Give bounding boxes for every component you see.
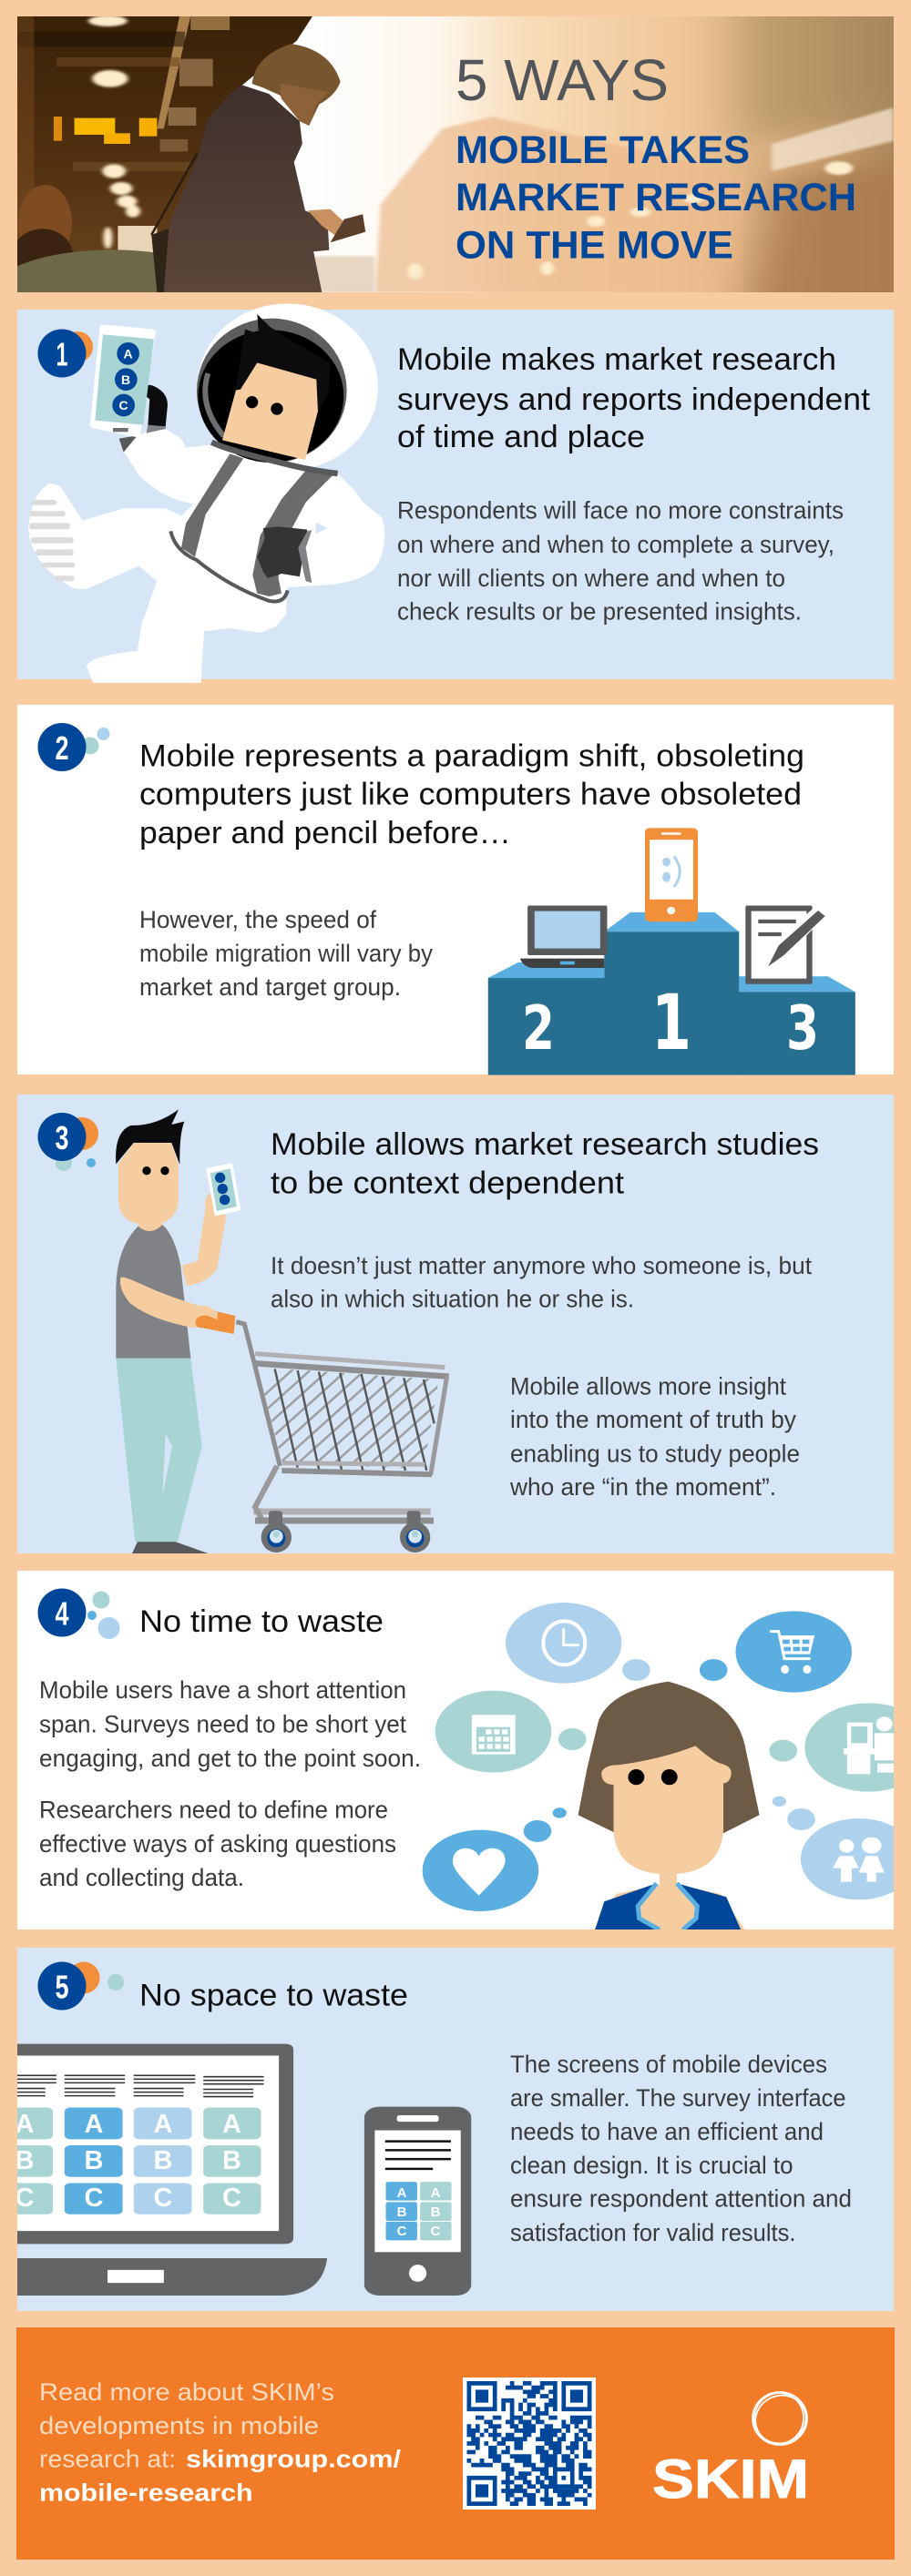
number badge 5: 5 <box>55 1969 69 2005</box>
number badge 4 <box>38 1588 120 1639</box>
heading: computers just like computers have obsoleted <box>139 778 802 812</box>
number badge 3 <box>38 1113 98 1171</box>
body text: span. Surveys need to be short yet <box>39 1710 407 1737</box>
read more text <box>39 2378 402 2506</box>
body text: moment of truth: into the moment of truth by <box>510 1406 797 1433</box>
illustration: phone survey: A <box>397 2185 407 2201</box>
body text: satisfaction for valid results. <box>510 2219 796 2246</box>
body text: market and target group. <box>139 973 401 1001</box>
illustration: laptop survey: A <box>15 2110 35 2139</box>
illustration: laptop survey: C <box>222 2184 241 2213</box>
read more text: skimgroup.com/ <box>186 2446 402 2473</box>
illustration: phone survey: C <box>397 2224 407 2239</box>
heading: No time to waste <box>139 1604 384 1639</box>
body text: Mobile users have a short attention <box>39 1676 406 1704</box>
panel: 5 no space to waste <box>5 1948 894 2311</box>
body text: However, the speed of <box>139 906 377 933</box>
heading: to be context dependent <box>271 1166 625 1200</box>
illustration: podium with phone, laptop and paper: 3 <box>786 993 819 1064</box>
read more text: developments in mobile <box>39 2412 319 2439</box>
phone answer letters: C <box>118 398 128 412</box>
body text: moment of truth <box>509 1373 800 1501</box>
heading: surveys and reports independent <box>397 382 871 417</box>
illustration: phone survey: A <box>431 2185 441 2201</box>
panel background <box>17 1095 894 1553</box>
number badge 5 <box>38 1961 124 2011</box>
panel background <box>17 705 894 1074</box>
body text: nor will clients on where and when to <box>397 565 785 592</box>
read more text: Read more about SKIM’s <box>39 2378 334 2406</box>
bubble: person at desk <box>769 1703 894 1792</box>
body text: are smaller. The survey interface <box>510 2084 845 2112</box>
phone answer letters: B <box>121 372 130 387</box>
body text <box>139 906 434 1001</box>
body text: The screens of mobile devices <box>510 2051 827 2078</box>
body text <box>39 1676 421 1891</box>
body text: Respondents will face no more constraints <box>397 497 844 524</box>
panel: 3 context dependent <box>17 1095 894 1553</box>
panel background <box>17 310 894 679</box>
heading: Mobile allows market research studies <box>271 1127 819 1162</box>
bubble: clock <box>506 1603 650 1684</box>
illustration: laptop survey: B <box>15 2146 34 2175</box>
body text: situation <box>271 1252 813 1313</box>
illustration: podium with phone, laptop and paper <box>488 828 855 1075</box>
QR code <box>463 2377 596 2510</box>
SKIM logo <box>652 2386 814 2510</box>
illustration: podium with phone, laptop and paper: 1 <box>651 978 691 1067</box>
bubble: children <box>773 1796 894 1899</box>
number badge 1: 1 <box>56 335 67 373</box>
body text: moment of truth: who are “in the moment”. <box>509 1473 776 1501</box>
title: 5 ways: 5 WAYS <box>456 47 669 113</box>
illustration: laptop survey: C <box>15 2184 35 2213</box>
photo: man checking phone on a train platform <box>0 0 911 335</box>
illustration: astronaut with phone <box>28 303 384 683</box>
illustration: laptop survey: A <box>222 2110 241 2139</box>
heading <box>397 342 871 454</box>
number badge 3: 3 <box>55 1119 69 1156</box>
panel: header photo and title <box>17 16 894 292</box>
title: mobile takes market research on the move: ON THE MOVE <box>456 224 733 268</box>
body text: and collecting data. <box>39 1864 244 1891</box>
phone answer letters: A <box>123 346 133 361</box>
panel: 4 no time to waste <box>17 1571 911 1929</box>
illustration: laptop survey: C <box>85 2184 104 2213</box>
body text: moment of truth: Mobile allows more insight <box>510 1373 787 1400</box>
illustration: laptop survey: A <box>154 2110 173 2139</box>
body text: engaging, and get to the point soon. <box>39 1745 421 1772</box>
body text: ensure respondent attention and <box>510 2185 852 2213</box>
body text: mobile migration will vary by <box>139 940 434 967</box>
illustration: shopper with phone and cart <box>116 1109 522 1553</box>
illustration: laptop survey: B <box>222 2146 241 2175</box>
number badge 1 <box>38 330 93 377</box>
illustration: phone survey: C <box>431 2224 441 2239</box>
body text <box>510 2051 852 2246</box>
cart wheels <box>261 1511 430 1553</box>
illustration: phone survey <box>364 2107 471 2296</box>
panel background <box>17 1948 894 2311</box>
phone answer letters <box>118 346 133 412</box>
illustration: laptop survey: B <box>85 2146 103 2175</box>
panel background <box>17 1571 894 1929</box>
illustration: laptop survey <box>5 2044 327 2296</box>
bubble: heart <box>423 1807 567 1911</box>
bubble: shopping cart <box>700 1611 852 1693</box>
read more text: mobile-research <box>39 2479 253 2506</box>
body text: check results or be presented insights. <box>397 597 802 625</box>
read more text: research at: <box>39 2446 176 2473</box>
illustration: phone survey: B <box>397 2204 407 2220</box>
body text: needs to have an efficient and <box>510 2118 824 2145</box>
body text: situation: also in which situation he or she is. <box>271 1286 634 1313</box>
body text: clean design. It is crucial to <box>510 2152 793 2179</box>
number badge 4: 4 <box>55 1595 69 1632</box>
heading <box>271 1127 819 1200</box>
heading <box>139 739 804 850</box>
body text: Researchers need to define more <box>39 1796 388 1823</box>
illustration: laptop survey: B <box>154 2146 172 2175</box>
SKIM logo: SKIM <box>652 2449 809 2510</box>
body text: moment of truth: enabling us to study people <box>510 1441 800 1468</box>
body text: situation: It doesn’t just matter anymore who someone is, but <box>271 1252 813 1279</box>
panel: footer call to action <box>16 2327 895 2560</box>
heading: Mobile makes market research <box>397 342 836 377</box>
number badge 2 <box>38 723 109 771</box>
illustration: podium with phone, laptop and paper: 2 <box>522 993 555 1064</box>
bubble: calendar <box>435 1691 587 1773</box>
illustration: woman with thought bubbles <box>423 1603 911 1929</box>
illustration: laptop survey: A <box>85 2110 104 2139</box>
title: mobile takes market research on the move <box>456 129 856 268</box>
body text: effective ways of asking questions <box>39 1830 396 1858</box>
woman <box>578 1682 760 1929</box>
phone with answers <box>93 328 154 434</box>
heading: paper and pencil before… <box>139 816 511 850</box>
body text <box>397 497 844 625</box>
heading: Mobile represents a paradigm shift, obsoleting <box>139 739 804 774</box>
panel: 1 independent of time and place <box>17 303 894 683</box>
title: mobile takes market research on the move: MARKET RESEARCH <box>456 177 856 219</box>
heading: of time and place <box>397 420 645 454</box>
footer background <box>16 2327 895 2560</box>
body text: on where and when to complete a survey, <box>397 531 834 558</box>
number badge 2: 2 <box>55 729 69 767</box>
illustration: phone survey: B <box>431 2204 441 2220</box>
illustration: laptop survey: C <box>154 2184 173 2213</box>
title: mobile takes market research on the move: MOBILE TAKES <box>456 129 750 172</box>
panel: 2 paradigm shift <box>17 705 894 1075</box>
heading: No space to waste <box>139 1978 408 2012</box>
